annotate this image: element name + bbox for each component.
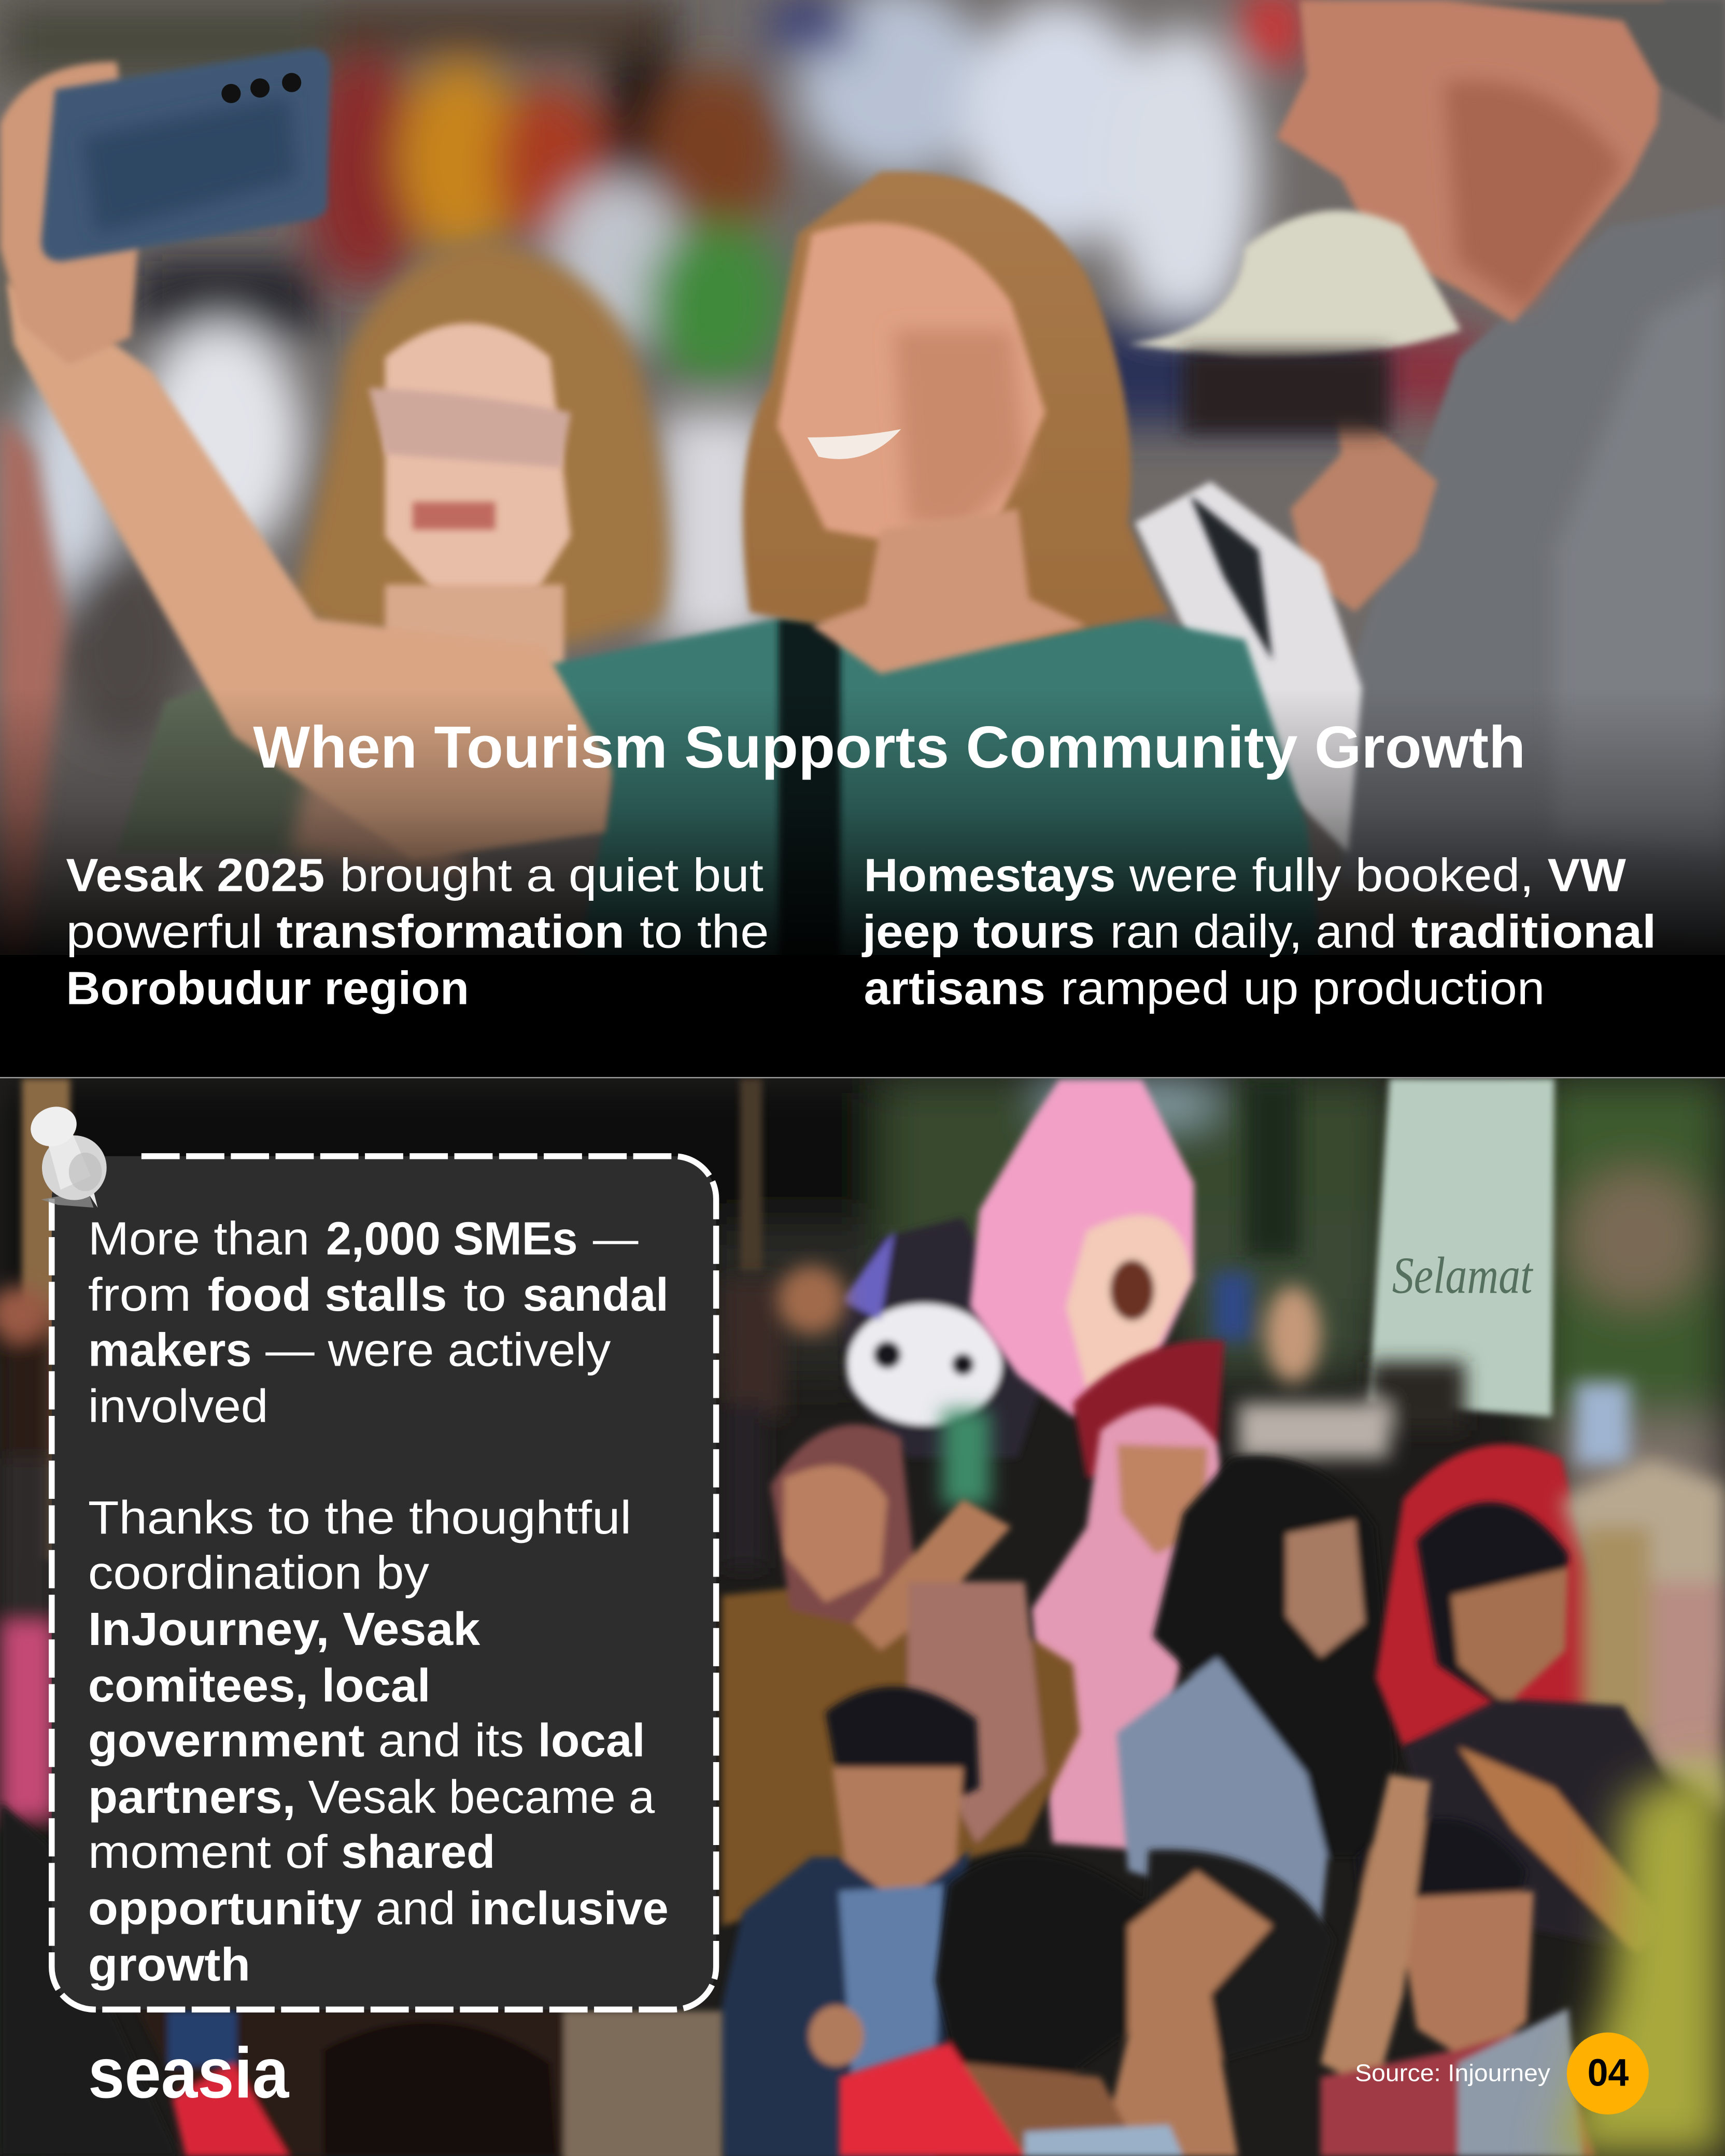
banner	[1369, 1079, 1554, 1417]
card paragraph two: moment of	[88, 1826, 328, 1878]
page number badge	[1567, 2033, 1649, 2115]
page number badge: 04	[1588, 2051, 1629, 2094]
banner text: Selamat	[1392, 1246, 1534, 1304]
card paragraph two: and	[376, 1882, 455, 1935]
person with white hat and backpack	[1128, 210, 1461, 853]
woman in brown laughing	[722, 1424, 1080, 1925]
card paragraph one: makers	[88, 1324, 252, 1376]
card paragraph one: More than	[88, 1212, 309, 1265]
card paragraph two: local	[538, 1714, 645, 1767]
text block: right column: were fully booked,	[1129, 849, 1534, 902]
blurred festival crowd background	[0, 0, 1486, 743]
text block: left column	[66, 849, 769, 1014]
boy in blue shirt and denim jacket	[715, 1686, 980, 2156]
woman's teal shirt	[536, 619, 1321, 963]
red scarf woman	[1073, 1340, 1224, 1479]
smartphone	[41, 48, 330, 261]
bottom fade to black	[0, 688, 1725, 955]
text block: right column: jeep tours	[861, 906, 1095, 958]
card paragraph two: and its	[378, 1714, 524, 1767]
crowd left side behind card	[0, 1279, 784, 2156]
card paragraph two: inclusive	[469, 1882, 669, 1935]
text block: left column: to the	[640, 906, 769, 958]
card paragraph two: government	[88, 1714, 364, 1767]
card paragraph one: sandal	[522, 1269, 669, 1321]
card paragraph one: food stalls	[208, 1269, 447, 1321]
text block: right column: VW	[1548, 849, 1627, 902]
source credit: Source: Injourney	[1355, 2059, 1551, 2086]
card paragraph two: InJourney, Vesak	[88, 1603, 480, 1655]
man in grey t-shirt	[1277, 0, 1725, 949]
photo: crowd celebrating with balloons	[0, 1079, 1725, 2156]
card paragraph two: partners,	[88, 1771, 296, 1823]
pink balloon	[970, 1080, 1194, 1417]
card paragraph two: Thanks to the thoughtful	[88, 1492, 631, 1544]
man's hair	[1445, 0, 1725, 124]
card paragraph one: involved	[88, 1380, 268, 1432]
foreground child heads	[839, 1850, 1334, 2156]
card: SME text panel	[52, 1156, 716, 2009]
card paragraph one: —	[593, 1212, 639, 1265]
thumbs-up fist	[1290, 392, 1437, 612]
text block: left column: transformation	[276, 906, 625, 958]
text block: left column: brought a quiet but	[340, 849, 763, 902]
card paragraph two	[88, 1492, 669, 1991]
divider line	[0, 1077, 1725, 1079]
woman in pink hijab	[1031, 1406, 1224, 1850]
title: When Tourism Supports Community Growth	[253, 715, 1525, 781]
card paragraph one: 2,000 SMEs	[326, 1212, 578, 1265]
boy in black shirt	[1403, 1502, 1706, 1953]
card paragraph one: — were actively	[265, 1324, 611, 1376]
woman in red hijab	[1376, 1444, 1623, 1747]
left foreground person in red	[0, 413, 66, 990]
blurred green foreground	[1554, 1765, 1725, 2156]
right side crowd	[1561, 1458, 1725, 1815]
card paragraph two: comitees, local	[88, 1659, 431, 1712]
shouting boy bottom right	[1321, 1775, 1596, 2156]
card paragraph one: to	[463, 1269, 506, 1321]
text block: left column: Vesak 2025	[66, 849, 324, 902]
text block: left column: powerful	[66, 906, 263, 958]
text block: right column: ramped up production	[1061, 962, 1545, 1014]
man's face	[1277, 0, 1664, 323]
card paragraph two: coordination by	[88, 1547, 429, 1599]
text block: right column: Homestays	[864, 849, 1115, 902]
card paragraph one: from	[88, 1269, 191, 1321]
card paragraph two: Vesak became a	[308, 1771, 655, 1823]
text block: right column: traditional	[1411, 906, 1656, 958]
card paragraph one	[88, 1212, 669, 1432]
card background and dashed border	[52, 1156, 716, 2009]
hands and phones background right	[777, 1266, 1630, 1506]
card paragraph two: opportunity	[88, 1882, 362, 1935]
Kuromi balloon	[842, 1217, 1045, 1458]
woman in black hijab	[1117, 1456, 1396, 1925]
logo: seasia: seasia	[88, 2033, 289, 2113]
woman's raised arm	[7, 282, 612, 860]
card paragraph two: shared	[341, 1826, 495, 1878]
text block: left column: Borobudur region	[66, 962, 469, 1014]
girl with curly hair	[117, 240, 668, 881]
dark lower-left crowd	[0, 1802, 722, 2156]
text block: right column	[861, 849, 1656, 1014]
woman's hair and face	[743, 172, 1169, 674]
text block: right column: artisans	[864, 962, 1045, 1014]
shirt strap	[779, 619, 841, 963]
dark roof and trees background	[0, 1079, 1725, 1692]
photo: tourists taking a selfie at Vesak	[0, 0, 1725, 955]
text block: right column: ran daily, and	[1110, 906, 1396, 958]
icon: white push pin	[25, 1100, 107, 1208]
hand	[0, 62, 137, 364]
card paragraph two: growth	[88, 1939, 250, 1991]
